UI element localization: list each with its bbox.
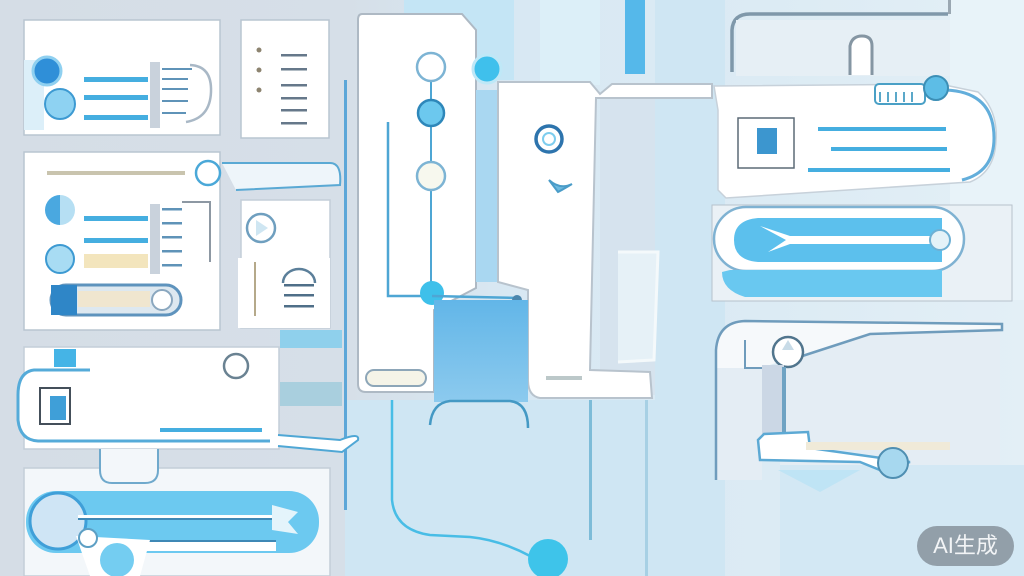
vertical line bbox=[589, 400, 592, 540]
badge: AI generated: AI生成 bbox=[933, 533, 998, 558]
panel: bottom-left card bbox=[24, 449, 330, 576]
node: cyan dot top bbox=[473, 55, 501, 83]
background colour bands bbox=[345, 0, 1024, 576]
panel: top small list card bbox=[241, 20, 329, 138]
panel: middle-left card bbox=[24, 152, 220, 330]
panel: lower-right bracket bbox=[716, 321, 1002, 492]
vertical line right bbox=[645, 400, 648, 576]
panel: top-right bracket bbox=[732, 0, 951, 76]
panel: small middle card bbox=[238, 200, 330, 328]
panel: upper-right card bbox=[714, 76, 996, 198]
connector: bracket top bbox=[222, 163, 340, 190]
node: bottom cyan dot bbox=[528, 539, 568, 576]
panel: lower-left card bbox=[18, 347, 358, 452]
badge: AI generated bbox=[917, 526, 1014, 566]
panel: central second column bbox=[498, 82, 712, 398]
blue strip by column bbox=[476, 90, 498, 282]
loop line: bottom pipe bbox=[392, 400, 530, 556]
bracket: pool lower bbox=[430, 401, 528, 428]
panel: top-left card bbox=[24, 20, 220, 135]
panel: blue pool bbox=[434, 300, 528, 402]
bands: right of mid-left panels bbox=[280, 80, 347, 510]
panel: blue capsule card bbox=[712, 205, 1012, 301]
bracket: faint center right bbox=[618, 252, 658, 362]
panel: central tall column bbox=[358, 14, 522, 392]
